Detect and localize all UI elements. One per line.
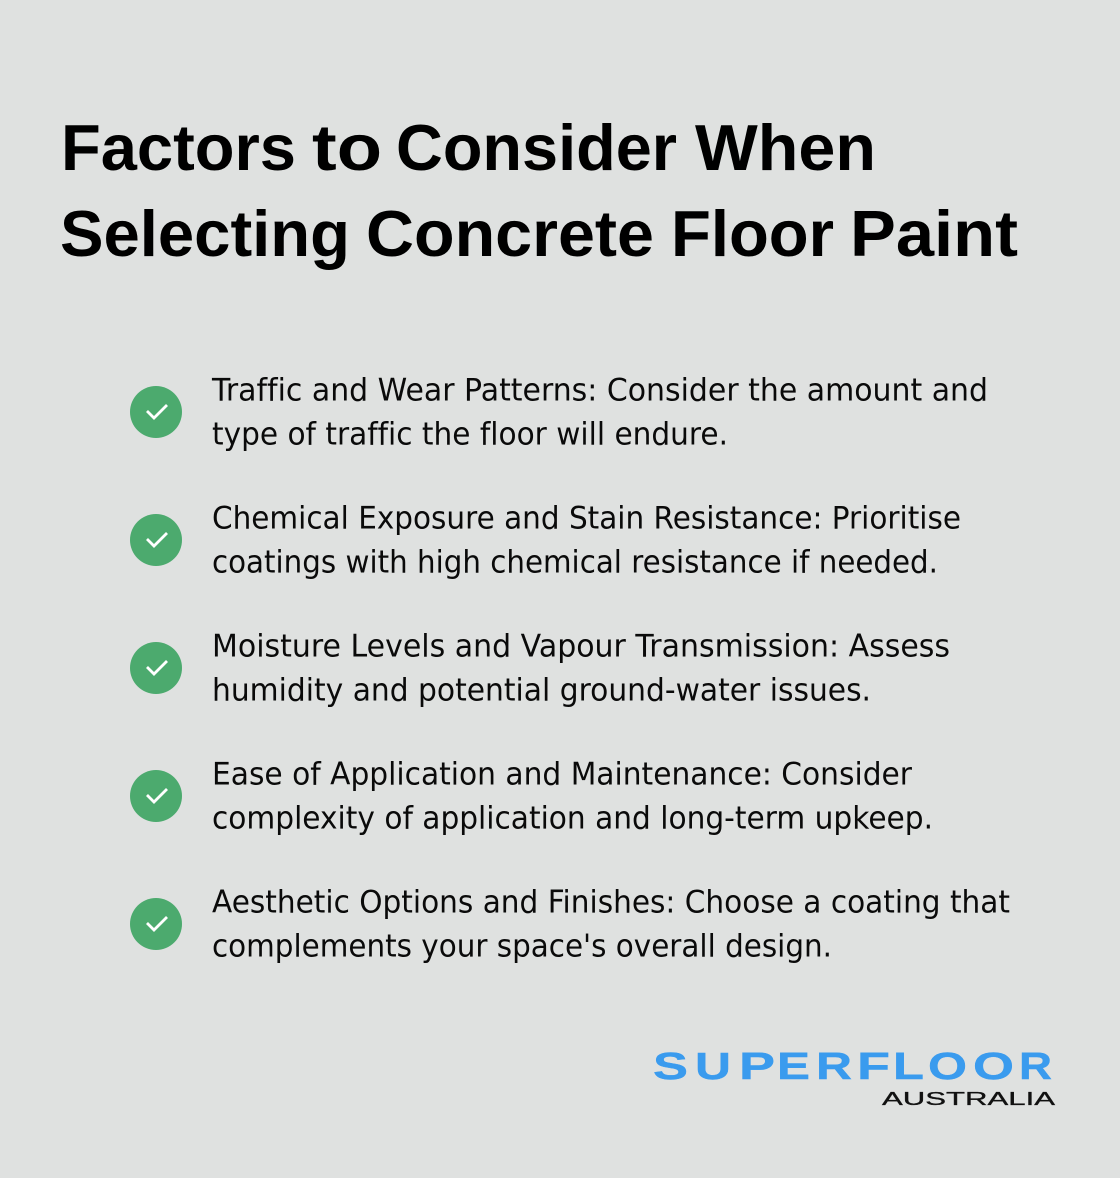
title: Selecting [60, 197, 350, 270]
icon: check 5 [130, 898, 182, 950]
logo: Superfloor Australia [653, 1046, 1056, 1109]
text: ease of application [212, 756, 933, 836]
text: ease of application: complexity of application and long-term upkeep. [212, 800, 933, 836]
text: chemical exposure [212, 500, 961, 580]
logo: Superfloor Australia: R [1019, 1046, 1052, 1088]
title: Paint [850, 197, 1018, 270]
logo: Superfloor Australia: O [973, 1046, 1014, 1088]
title: to [312, 111, 382, 184]
text: moisture levels [212, 628, 950, 708]
logo: Superfloor Australia: F [857, 1046, 890, 1088]
logo: Superfloor Australia: O [928, 1046, 967, 1088]
title: Consider [396, 111, 677, 184]
title: When [695, 111, 876, 184]
logo: Superfloor Australia: U [695, 1046, 731, 1088]
text: moisture levels: humidity and potential ground-water issues. [212, 672, 871, 708]
text: traffic and wear: type of traffic the floor will endure. [212, 416, 728, 452]
icon: check 3 [130, 642, 182, 694]
logo: Superfloor Australia: E [777, 1046, 810, 1088]
text: chemical exposure: Chemical Exposure and Stain Resistance: Prioritise [212, 500, 961, 536]
text: ease of application: Ease of Application and Maintenance: Consider [212, 756, 912, 792]
logo: Superfloor Australia: S [653, 1046, 688, 1088]
icon: check 4 [130, 770, 182, 822]
text: aesthetic options [212, 884, 1010, 964]
text: traffic and wear: Traffic and Wear Patterns: Consider the amount and [211, 372, 988, 408]
text: chemical exposure: coatings with high chemical resistance if needed. [212, 544, 938, 580]
title: Floor [671, 197, 834, 270]
icon: check 1 [130, 386, 182, 438]
list item: ease of application [130, 756, 933, 836]
title [60, 111, 1018, 270]
list item: chemical exposure [130, 500, 961, 580]
text: aesthetic options: complements your space's overall design. [212, 928, 832, 964]
text: moisture levels: Moisture Levels and Vapour Transmission: Assess [212, 628, 950, 664]
icon: check 2 [130, 514, 182, 566]
logo: Superfloor Australia: R [816, 1046, 852, 1088]
logo: Superfloor Australia: P [739, 1046, 775, 1088]
logo: Superfloor Australia: AUSTRALIA [882, 1088, 1056, 1109]
list item: moisture levels [130, 628, 950, 708]
title: Concrete [366, 197, 654, 270]
list item: aesthetic options [130, 884, 1010, 964]
list item: traffic and wear [130, 372, 988, 452]
text: traffic and wear [211, 372, 988, 452]
logo: Superfloor Australia: L [893, 1046, 924, 1088]
title: Factors [61, 111, 296, 184]
text: aesthetic options: Aesthetic Options and Finishes: Choose a coating that [212, 884, 1010, 920]
